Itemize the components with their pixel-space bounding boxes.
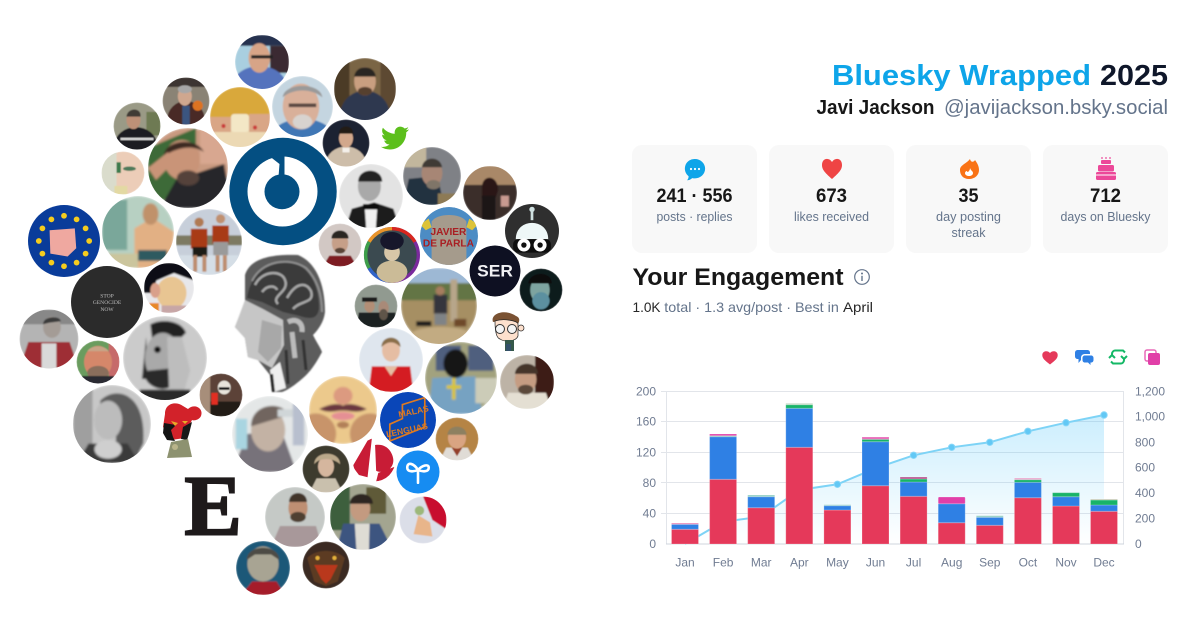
avatar: woman seated in dark room: [463, 166, 517, 220]
left axis labels: 160: [636, 414, 656, 428]
avatar: snake illustration: [302, 542, 350, 588]
central anatomical head portrait: [235, 255, 325, 392]
month labels: Feb: [713, 556, 734, 570]
panel: days on Bluesky: [1043, 145, 1168, 253]
avatar: two men in red shirts: [176, 209, 242, 275]
avatar: close-up eye with green: [102, 152, 144, 194]
engagement summary: 1.0K: [632, 299, 661, 315]
panel: posts and replies: posts · replies: [656, 210, 732, 224]
panel: likes received: likes received: [794, 210, 869, 224]
panel: posting streak: [906, 145, 1031, 253]
avatar: man resting on arm: [148, 128, 232, 208]
combined bar and line chart: [636, 384, 1165, 570]
avatar: woman in red: [359, 328, 423, 392]
left axis labels: [636, 384, 656, 551]
avatar: man in flannel: [20, 310, 78, 370]
panel: posts and replies: 241 · 556: [656, 186, 732, 207]
legend icons: [1042, 350, 1160, 365]
panel: posting streak: day posting: [936, 210, 1001, 224]
avatar: woman in greyscale: [73, 385, 151, 463]
avatar: bald man with glasses: [235, 35, 289, 89]
title: Bluesky Wrapped: [832, 60, 1091, 92]
icon: green bird: [381, 127, 409, 149]
avatar: painted child in red: [236, 541, 290, 595]
avatar: masked man with laptop: [425, 342, 497, 414]
avatar: man in adidas jacket: [114, 102, 160, 150]
avatar: cartoon man: [144, 263, 194, 313]
month labels: Mar: [751, 556, 772, 570]
month labels: Apr: [790, 556, 809, 570]
stacked bars: [672, 403, 1118, 544]
panel: days on Bluesky: 712: [1090, 186, 1121, 207]
avatar: blue EU fist: [28, 205, 100, 277]
icon: cake: [1096, 157, 1116, 180]
user name and handle: [816, 97, 1168, 119]
avatar: robot head: [505, 204, 559, 258]
cumulative area and line: [685, 412, 1107, 544]
panel: days on Bluesky: days on Bluesky: [1060, 210, 1151, 224]
icon: reply legend: [1075, 350, 1094, 365]
avatar: Stop Genocide Now: [71, 266, 143, 338]
right axis labels: [1135, 384, 1165, 551]
month labels: Jun: [866, 556, 885, 570]
heading: Your Engagement: Your Engagement: [632, 264, 844, 291]
avatar: Malas Lenguas: MALAS: [397, 403, 430, 419]
avatar: man with film reel: [162, 78, 210, 124]
avatar: Javier de Parla: JAVIER: [430, 227, 467, 238]
panel: posting streak: streak: [952, 226, 986, 240]
left axis labels: 200: [636, 384, 656, 398]
month labels: Dec: [1093, 556, 1115, 570]
right axis labels: 1,000: [1135, 410, 1165, 424]
month labels: Jul: [906, 556, 921, 570]
avatar: man in white shirt: [500, 355, 554, 409]
month labels: Sep: [979, 556, 1001, 570]
month labels: Jan: [675, 556, 695, 570]
avatar: smiling blond man: [436, 418, 478, 460]
avatar: Malas Lenguas: LENGUAS: [385, 421, 429, 439]
engagement summary: April: [843, 299, 873, 315]
panel: likes received: [769, 145, 894, 253]
left axis labels: 120: [636, 446, 656, 460]
avatar: yellow top, red nails and cup: [210, 87, 270, 147]
avatar: Javier de Parla: DE PARLA: [423, 238, 475, 249]
title: 2025: [1100, 60, 1168, 92]
avatar: stormtrooper with phone: [200, 374, 242, 416]
panel: posts and replies: [632, 145, 757, 253]
user name and handle: @javijackson.bsky.social: [944, 97, 1168, 119]
avatar: red P logo: [352, 438, 396, 482]
month labels: Oct: [1019, 556, 1038, 570]
avatar: hiker in landscape: [401, 268, 477, 350]
avatar: man reading, grey beard: [403, 147, 461, 205]
avatar: two men with hats: [354, 284, 398, 328]
engagement summary: total · 1.3 avg/post · Best in: [664, 299, 839, 315]
icon: info: [855, 270, 869, 284]
avatar: moustache close-up: [309, 376, 377, 444]
avatar: bow tie portrait: [339, 164, 403, 228]
avatar: SER radio: [470, 246, 520, 296]
avatar: newspaper E logo: E: [184, 458, 242, 554]
avatar cluster: [20, 35, 562, 595]
avatar: blue sprout: [396, 450, 440, 494]
avatar text: Stop Genocide Now: GENOCIDE: [93, 300, 122, 306]
avatar: Malas Lenguas: [380, 392, 436, 448]
avatar: man with floral shirt: [265, 487, 325, 547]
icon: chat bubble: [685, 159, 705, 180]
avatar: shirtless man on telephone: [102, 196, 174, 268]
avatar text: Stop Genocide Now: [93, 294, 122, 313]
avatar: woman in bonnet portrait: [302, 446, 350, 492]
icon: like legend: [1042, 351, 1058, 364]
avatar text: Stop Genocide Now: STOP: [100, 294, 114, 300]
avatar: man covering half face in greyscale: [123, 316, 207, 402]
right axis labels: 800: [1135, 436, 1155, 450]
panel: likes received: 673: [816, 186, 847, 207]
month labels: Nov: [1055, 556, 1077, 570]
avatar: SER radio: SER: [477, 263, 513, 281]
month labels: Aug: [941, 556, 962, 570]
right axis labels: 0: [1135, 537, 1142, 551]
avatar: grey-haired man: [272, 76, 333, 137]
avatar: red-faced man with beard: [76, 340, 120, 385]
user name and handle: Javi Jackson: [816, 97, 934, 119]
right axis labels: 600: [1135, 460, 1155, 474]
avatar: red comic demon: [163, 403, 202, 458]
right axis labels: 200: [1135, 512, 1155, 526]
avatar: politician in blue jacket: [330, 484, 396, 550]
panel: posting streak: 35: [958, 186, 979, 207]
avatar: man in checked shirt: [318, 224, 362, 266]
icon: quote legend: [1145, 350, 1160, 365]
avatar: rainbow ring portrait: [364, 227, 420, 283]
avatar: cartoon man with glasses: [493, 312, 524, 351]
avatar: man with blue smoke: [520, 268, 562, 312]
left axis labels: 80: [643, 476, 656, 490]
avatar: man in cream sweater: [322, 120, 370, 166]
avatar: hand sketch of man: [232, 396, 308, 472]
icon: repost legend: [1109, 350, 1127, 364]
avatar: red curtain drawing: [400, 496, 446, 544]
icon: flame: [960, 159, 979, 179]
icon: heart: [822, 159, 842, 179]
avatar text: Stop Genocide Now: NOW: [100, 307, 114, 313]
left axis labels: 0: [649, 537, 656, 551]
right axis labels: 1,200: [1135, 384, 1165, 398]
left axis labels: 40: [643, 506, 656, 520]
avatar: man in dark shirt among trees: [334, 58, 396, 120]
month labels: May: [826, 556, 849, 570]
central blue logo: [229, 138, 337, 245]
avatar: Javier de Parla: [420, 207, 478, 265]
right axis labels: 400: [1135, 486, 1155, 500]
month labels: [675, 556, 1115, 570]
